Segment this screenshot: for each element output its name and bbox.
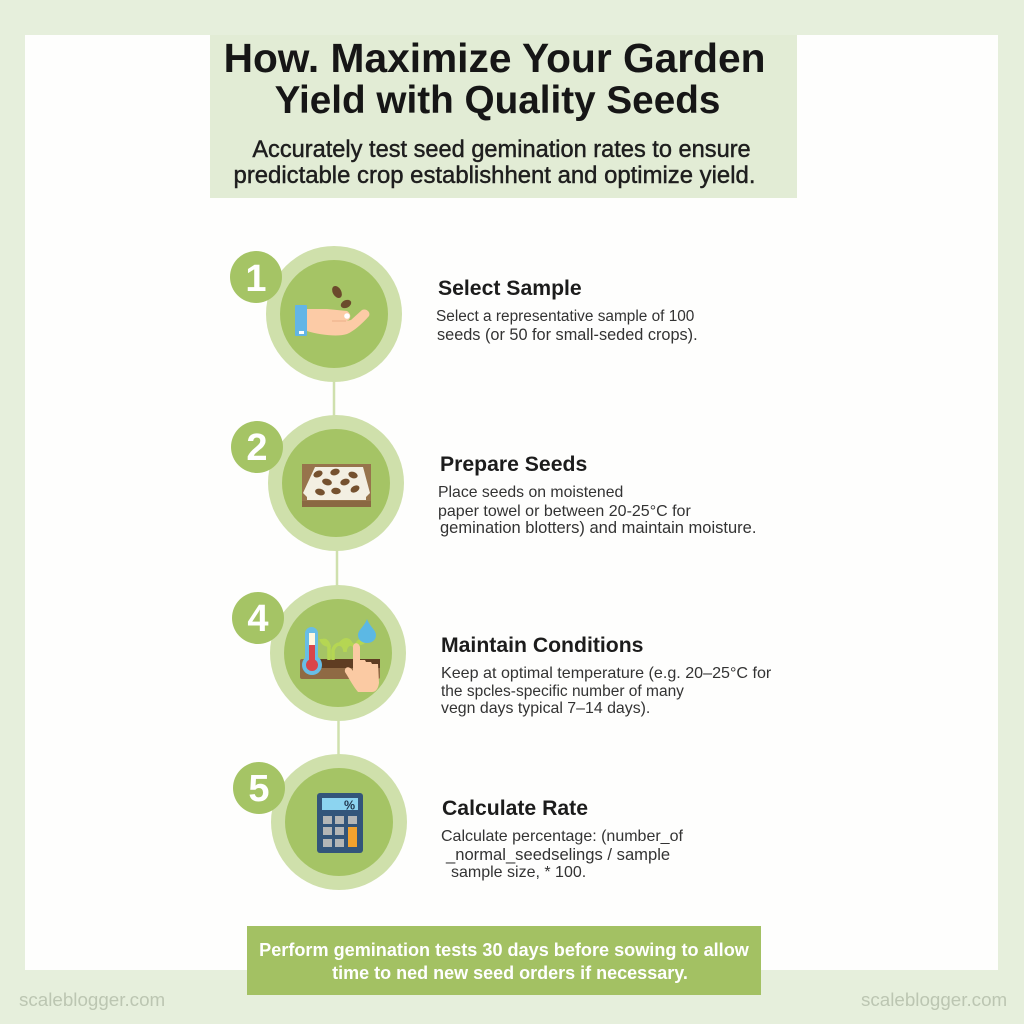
step 1 icon: hand with seeds [230,246,402,382]
step 4 text: vegn days typical 7–14 days). [441,700,650,717]
step 1 text: Select a representative sample of 100 [436,308,694,325]
step 2 text: Place seeds on moistened [438,484,623,501]
subtitle: Accurately test seed gemination rates to ensure [252,137,751,163]
title: Yield with Quality Seeds [275,79,720,122]
step 2 heading: Prepare Seeds [440,453,587,476]
step 2 text: paper towel or between 20-25°C for [438,503,691,520]
step 4 text [441,664,771,717]
step 1 text [436,308,698,344]
subtitle: predictable crop establishhent and optimize yield. [234,162,755,189]
title [224,35,765,122]
step 2 text [438,484,756,537]
step 2 icon: seeds on tray [231,415,404,551]
subtitle [234,137,755,189]
step 4 heading: Maintain Conditions [441,634,643,657]
step 5 text [441,828,683,881]
step 1 icon: hand with seeds: 1 [245,258,267,300]
step 4 icon: thermometer, seedlings, hand, drop [232,585,406,721]
step 2 text: gemination blotters) and maintain moisture. [440,519,756,537]
title: How. Maximize Your Garden [224,35,765,81]
step 5 text: Calculate percentage: (number_of [441,828,683,845]
step 4 text: Keep at optimal temperature (e.g. 20–25°C for [441,664,771,682]
step 4 icon: thermometer, seedlings, hand, drop: 4 [247,598,269,640]
step 4 text: the spcles-specific number of many [441,683,684,700]
step 5 icon: calculator: 5 [248,768,270,810]
step 1 text: seeds (or 50 for small-seded crops). [437,326,698,344]
footer callout: time to ned new seed orders if necessary. [332,963,688,983]
step 5 heading: Calculate Rate [442,797,588,820]
watermark left: scaleblogger.com [19,989,165,1010]
step 5 icon: calculator [233,754,407,890]
step 1 heading: Select Sample [438,277,582,300]
step 2 icon: seeds on tray: 2 [246,427,268,469]
step 5 text: _normal_seedselings / sample [446,845,670,864]
footer callout [247,926,761,995]
step 5 icon: calculator: % [344,798,355,812]
step 5 text: sample size, * 100. [451,864,586,881]
footer callout: Perform gemination tests 30 days before sowing to allow [259,940,749,960]
header panel [210,35,797,198]
watermark right: scaleblogger.com [861,989,1007,1010]
